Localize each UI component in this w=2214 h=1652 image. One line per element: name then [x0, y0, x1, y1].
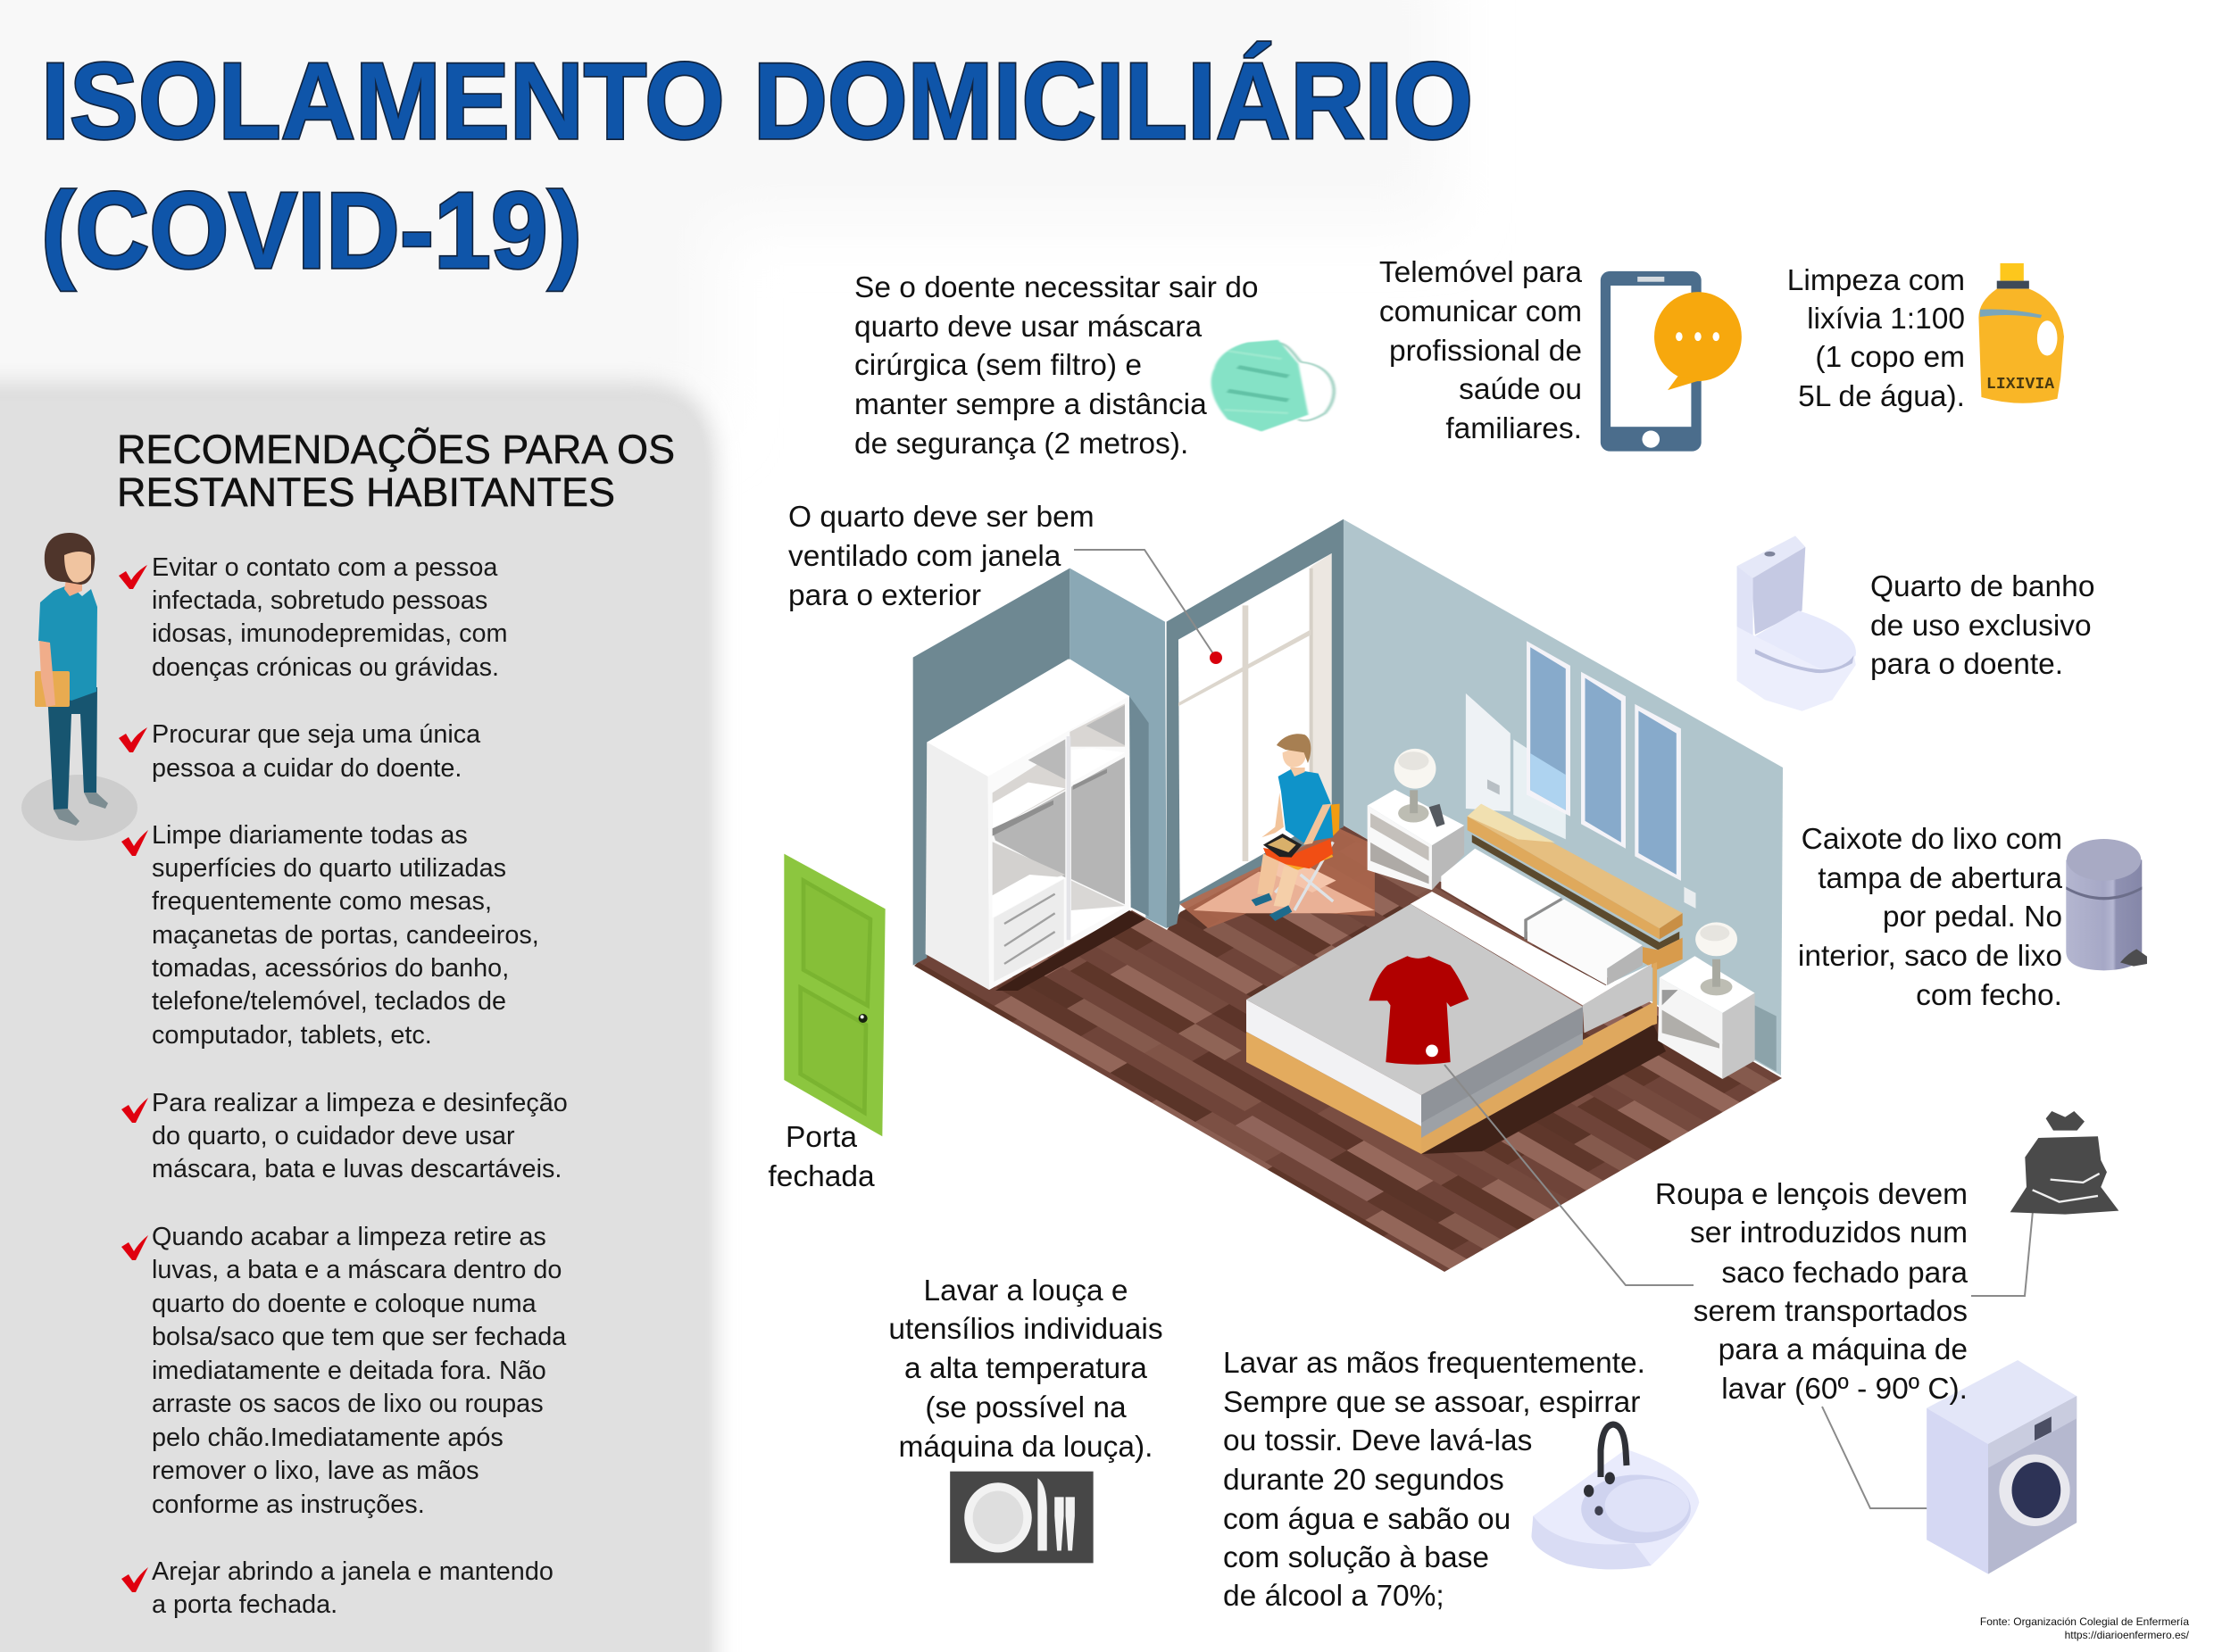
floor	[914, 826, 1782, 1272]
icon: standing woman	[21, 533, 137, 841]
marker: window	[1210, 652, 1222, 664]
icon: bleach bottle: LIXIVIA	[1986, 376, 2054, 394]
recommendation: remove gloves: bolsa/saco que tem que ser fechada	[152, 1323, 567, 1351]
recommendation: remove gloves: luvas, a bata e a máscara dentro do	[152, 1256, 562, 1284]
recommendation: clean surfaces: Limpe diariamente todas as	[152, 821, 468, 850]
text: bleach: lixívia 1:100	[1807, 303, 1965, 336]
text: ventilated room: para o exterior	[788, 579, 981, 612]
callout line: washing machine	[1822, 1407, 1931, 1508]
text: bleach: Limpeza com	[1787, 264, 1965, 297]
text: trash bin: Caixote do lixo com	[1802, 823, 2062, 856]
recommendation: protective equipment: Para realizar a limpeza e desinfeção	[152, 1089, 568, 1117]
recommendation: ventilate	[121, 1557, 554, 1619]
bed	[1246, 804, 1683, 1154]
text: bathroom: Quarto de banho	[1870, 570, 2094, 603]
recommendation: clean surfaces: maçanetas de portas, candeeiros,	[152, 921, 539, 950]
source note: Fonte: Organización Colegial de Enfermería	[1980, 1615, 2189, 1628]
recommendation: remove gloves: conforme as instruções.	[152, 1490, 425, 1519]
recommendation: single carer	[119, 720, 481, 783]
text: mask: Se o doente necessitar sair do	[854, 271, 1259, 304]
recommendation: clean surfaces: tomadas, acessórios do banho,	[152, 954, 509, 983]
text: dishes: (se possível na	[925, 1391, 1127, 1424]
text: mask: cirúrgica (sem filtro) e	[854, 349, 1142, 382]
icon: surgical mask	[1211, 340, 1334, 432]
text: laundry: Roupa e lençois devem	[1655, 1178, 1968, 1211]
recommendation: avoid contact	[119, 553, 508, 682]
text: mobile phone: saúde ou	[1459, 373, 1582, 406]
title	[41, 40, 1473, 291]
recommendation: remove gloves: quarto do doente e coloque numa	[152, 1290, 537, 1318]
callout line: bag	[1971, 1211, 2033, 1296]
text: laundry: saco fechado para	[1721, 1257, 1968, 1290]
text: trash bin: com fecho.	[1916, 979, 2062, 1012]
recommendation: protective equipment: do quarto, o cuidador deve usar	[152, 1122, 515, 1150]
text: closed door: Porta	[786, 1121, 857, 1154]
text: ventilated room: O quarto deve ser bem	[788, 501, 1095, 534]
panel: recommendations for other inhabitants	[0, 382, 716, 1652]
icon: pedal bin	[2066, 839, 2147, 970]
recommendation: clean surfaces: computador, tablets, etc.	[152, 1021, 432, 1050]
recommendation: ventilate: Arejar abrindo a janela e mantendo	[152, 1557, 554, 1586]
text: bleach: 5L de água).	[1798, 380, 1965, 413]
text: laundry: serem transportados	[1694, 1295, 1968, 1328]
sunlight on floor	[1180, 827, 1375, 928]
recommendation: clean surfaces: superfícies do quarto utilizadas	[152, 854, 506, 883]
icon: bleach bottle	[1978, 263, 2064, 403]
text: dishes: máquina da louça).	[899, 1431, 1153, 1464]
text: hand washing: Lavar as mãos frequentemente.	[1223, 1347, 1645, 1380]
icon: phone with chat bubble	[1601, 271, 1742, 452]
text: mobile phone: Telemóvel para	[1379, 256, 1582, 289]
recommendation: remove gloves	[121, 1223, 567, 1519]
right nightstand with lamp	[1658, 922, 1755, 1079]
text: bleach: (1 copo em	[1815, 341, 1965, 374]
icon: closed green door	[784, 854, 886, 1136]
recommendation: avoid contact: Evitar o contato com a pessoa	[152, 553, 498, 582]
panel heading: RESTANTES HABITANTES	[117, 469, 615, 515]
recommendation: clean surfaces	[121, 821, 539, 1050]
red t-shirt	[1369, 956, 1469, 1065]
recommendation: avoid contact: infectada, sobretudo pessoas	[152, 586, 487, 615]
recommendation: remove gloves: imediatamente e deitada fora. Não	[152, 1357, 546, 1385]
recommendation: single carer: Procurar que seja uma única	[152, 720, 481, 749]
text: hand washing: ou tossir. Deve lavá-las	[1223, 1424, 1532, 1457]
text: mobile phone: profissional de	[1389, 335, 1582, 368]
icon: washing machine	[1927, 1360, 2077, 1574]
wardrobe	[926, 659, 1145, 991]
text: mobile phone: comunicar com	[1379, 295, 1582, 328]
text: hand washing: com água e sabão ou	[1223, 1503, 1511, 1536]
recommendation: remove gloves: remover o lixo, lave as mãos	[152, 1457, 479, 1485]
recommendation: protective equipment	[121, 1089, 568, 1183]
left nightstand with lamp	[1368, 749, 1464, 890]
text: mask: manter sempre a distância	[854, 388, 1207, 421]
recommendation: remove gloves: arraste os sacos de lixo ou roupas	[152, 1390, 544, 1418]
recommendation: single carer: pessoa a cuidar do doente.	[152, 754, 462, 783]
bed base and blanket	[1246, 1032, 1421, 1154]
bed shadow	[1421, 1025, 1666, 1154]
text: dishes: utensílios individuais	[888, 1313, 1163, 1346]
illustration: isometric bedroom	[913, 519, 1783, 1272]
checklist: recommendations	[119, 553, 568, 1619]
text: dishes: Lavar a louça e	[923, 1274, 1128, 1307]
callout line: window	[1074, 550, 1222, 664]
recommendation: avoid contact: doenças crónicas ou grávidas.	[152, 653, 499, 682]
icon: toilet	[1737, 535, 1856, 711]
icon: washbasin	[1531, 1424, 1699, 1569]
recommendation: clean surfaces: frequentemente como mesas,	[152, 887, 492, 916]
text: hand washing: Sempre que se assoar, espirrar	[1223, 1386, 1640, 1419]
tall window	[1178, 553, 1332, 901]
icon: plate and cutlery	[950, 1472, 1094, 1563]
source note: https://diarioenfermero.es/	[2065, 1629, 2190, 1641]
callout line: clothes to bag	[1444, 1065, 1694, 1285]
text: mobile phone: familiares.	[1445, 412, 1582, 445]
recommendation: avoid contact: idosas, imunodepremidas, com	[152, 619, 508, 648]
text: bathroom: de uso exclusivo	[1870, 610, 2092, 643]
text: bathroom: para o doente.	[1870, 648, 2063, 681]
recommendation: clean surfaces: telefone/telemóvel, teclados de	[152, 987, 506, 1016]
text: laundry: lavar (60º - 90º C).	[1721, 1373, 1968, 1406]
text: trash bin: interior, saco de lixo	[1798, 940, 2062, 973]
recommendation: ventilate: a porta fechada.	[152, 1590, 337, 1619]
text: dishes: a alta temperatura	[904, 1352, 1147, 1385]
text: hand washing: durante 20 segundos	[1223, 1464, 1504, 1497]
text: mask: quarto deve usar máscara	[854, 311, 1203, 344]
text: laundry: para a máquina de	[1719, 1333, 1968, 1366]
recommendation: protective equipment: máscara, bata e luvas descartáveis.	[152, 1155, 562, 1183]
wall windows	[1466, 641, 1777, 1071]
text: hand washing: com solução à base	[1223, 1541, 1489, 1574]
panel heading: RECOMENDAÇÕES PARA OS	[117, 427, 675, 472]
bed headboard	[1468, 804, 1683, 970]
text: trash bin: por pedal. No	[1883, 901, 2062, 934]
walls	[913, 519, 1783, 1075]
text: ventilated room: ventilado com janela	[788, 540, 1061, 573]
text: hand washing: de álcool a 70%;	[1223, 1580, 1444, 1613]
text: trash bin: tampa de abertura	[1818, 862, 2062, 895]
title: (COVID-19)	[41, 170, 582, 291]
recommendation: remove gloves: Quando acabar a limpeza retire as	[152, 1223, 546, 1251]
text: closed door: fechada	[768, 1160, 875, 1193]
text: laundry: ser introduzidos num	[1690, 1216, 1968, 1249]
icon: garbage bag	[2010, 1111, 2118, 1215]
text: mask: de segurança (2 metros).	[854, 428, 1188, 461]
title: ISOLAMENTO DOMICILIÁRIO	[41, 40, 1473, 162]
seated person on chair	[1252, 734, 1340, 921]
recommendation: remove gloves: pelo chão.Imediatamente após	[152, 1424, 504, 1452]
